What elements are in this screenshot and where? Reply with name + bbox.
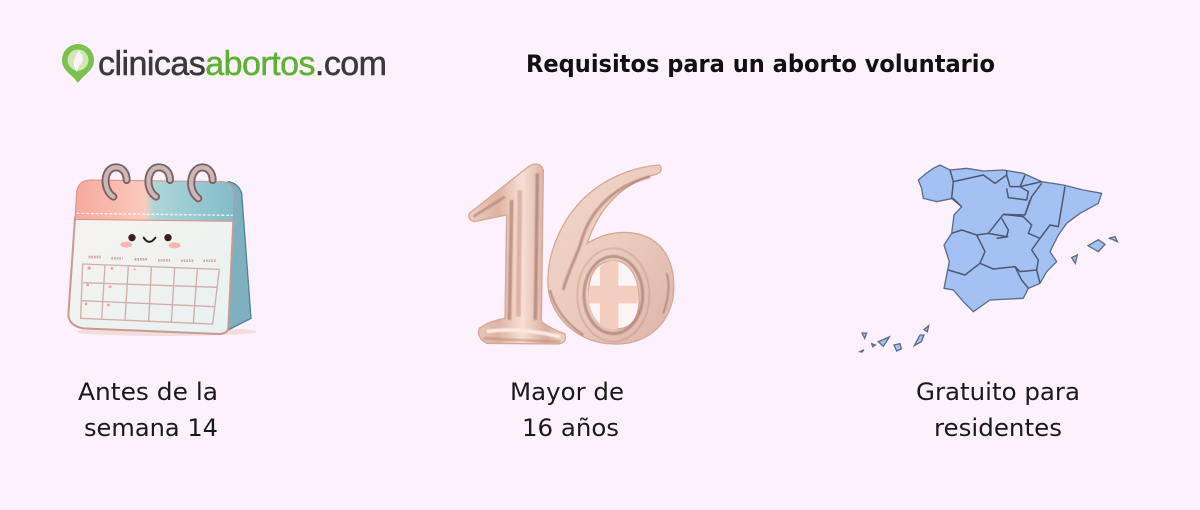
digit 1: [469, 164, 565, 344]
icon: smiling calendar: [68, 167, 257, 336]
6 shading: [550, 177, 669, 342]
icon: rose gold balloon number 16: [469, 164, 674, 344]
caption: Mayor de 16 años: Mayor de: [510, 378, 624, 406]
calendar pink dots: [85, 266, 136, 306]
caption: Mayor de 16 años: 16 años: [522, 414, 619, 442]
caption: Antes de la semana 14: Antes de la: [78, 378, 218, 406]
region borders: [948, 170, 1065, 288]
calendar back stand: [220, 182, 251, 334]
caption: Antes de la semana 14: [78, 378, 218, 442]
caption: Gratuito para residentes: Gratuito para: [916, 378, 1080, 406]
weekday labels: [89, 257, 216, 261]
Canary Islands: [860, 326, 929, 352]
calendar face: [120, 234, 181, 248]
caption: Gratuito para residentes: [916, 378, 1080, 442]
title: Requisitos para un aborto voluntario: [526, 50, 995, 78]
calendar shadow: [77, 327, 257, 336]
digit 6: [548, 165, 674, 344]
Balearic Islands: [1072, 237, 1117, 263]
caption: Gratuito para residentes: residentes: [934, 414, 1062, 442]
icon: green location pin: [62, 44, 94, 83]
calendar page: [68, 218, 233, 334]
calendar grid: [81, 264, 219, 324]
caption: Antes de la semana 14: semana 14: [84, 414, 218, 442]
map of Spain: [860, 165, 1117, 352]
plus inside the 6: [588, 261, 638, 329]
logo wordmark: clinicasabortos.com: [98, 45, 387, 83]
mainland regions: [918, 165, 1102, 312]
logo: clinicasabortos.com: [62, 44, 387, 83]
caption: Mayor de 16 años: [510, 378, 624, 442]
calendar header: [75, 180, 234, 221]
header stitching: [77, 213, 233, 215]
binder rings: [106, 167, 213, 198]
